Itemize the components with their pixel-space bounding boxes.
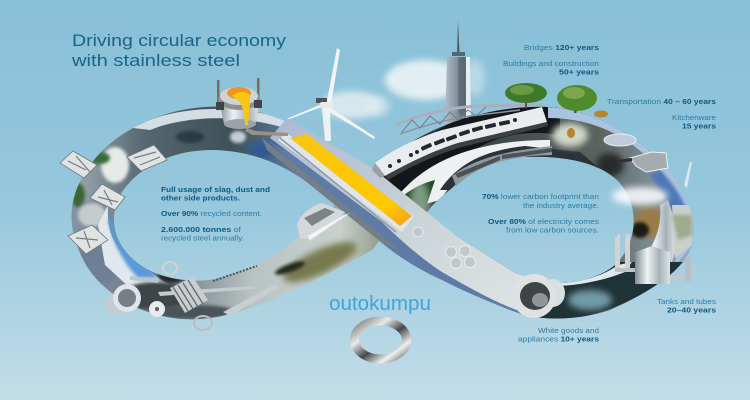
label: tanks and tubes: 20–40 years	[667, 306, 716, 314]
ladle with molten steel	[216, 78, 262, 129]
text block: carbon facts: 70% lower carbon footprint than	[482, 192, 599, 201]
text block: carbon facts	[482, 192, 599, 234]
train	[372, 107, 548, 180]
label: kitchenware: 15 years	[682, 122, 716, 130]
logo wordmark: outokumpu	[329, 293, 431, 315]
molten steel channel	[245, 128, 414, 232]
label: white goods: White goods and	[538, 326, 599, 335]
lower rail carriage	[452, 146, 552, 186]
kitchenware and insects	[567, 110, 692, 188]
text block: recycling facts: recycled steel annually.	[161, 234, 244, 242]
label: buildings and construction: 50+ years	[559, 68, 599, 76]
logo ring	[354, 321, 406, 359]
text block: recycling facts: other side products.	[161, 194, 240, 202]
label: tanks and tubes	[657, 297, 716, 314]
label: bridges: Bridges 120+ years	[524, 43, 599, 52]
text block: recycling facts: 2.600.000 tonnes of	[161, 225, 242, 234]
small rail wagon on crossing	[297, 203, 350, 240]
large coil	[512, 274, 565, 318]
infinity band: left loop	[72, 106, 380, 320]
text block: recycling facts: Over 90% recycled content.	[161, 209, 262, 218]
trees	[505, 83, 597, 113]
label: tanks and tubes: Tanks and tubes	[657, 297, 716, 306]
clouds	[322, 60, 485, 119]
central strip	[262, 118, 545, 318]
title: with stainless steel	[71, 51, 240, 70]
text block: recycling facts	[161, 185, 270, 242]
scrap metal pieces	[60, 145, 167, 254]
tanks and tubes	[615, 233, 691, 284]
label: transportation: Transportation 40 – 60 years	[607, 97, 716, 106]
recycled parts: tube, rings, bars, grate	[101, 262, 278, 330]
wind turbine	[286, 48, 375, 141]
label: buildings and construction: Buildings and construction	[503, 59, 599, 68]
steel coils	[413, 227, 476, 268]
text block: carbon facts: Over 80% of electricity comes	[488, 217, 599, 226]
text block: carbon facts: the industry average.	[523, 201, 599, 210]
text block: recycling facts: Full usage of slag, dust and	[161, 185, 270, 194]
skyscraper	[445, 20, 471, 130]
bridge	[395, 105, 542, 134]
label: kitchenware: Kitchenware	[672, 113, 716, 122]
title: Driving circular economy	[72, 31, 287, 50]
label: white goods: appliances 10+ years	[518, 334, 599, 344]
label: kitchenware	[672, 113, 716, 130]
infinity band: right loop	[370, 100, 700, 325]
sun glare	[612, 187, 668, 205]
text block: carbon facts: from low carbon sources.	[506, 226, 599, 234]
title	[71, 31, 287, 70]
label: white goods	[518, 326, 599, 344]
label: buildings and construction	[503, 59, 599, 76]
